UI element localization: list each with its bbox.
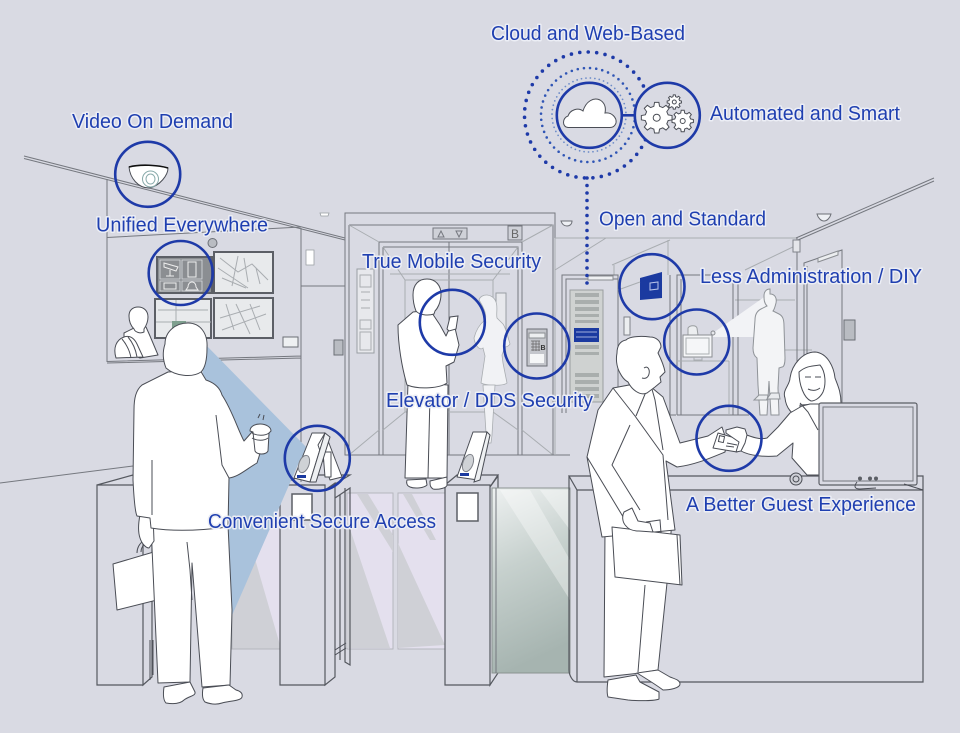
elevator: B	[511, 227, 519, 241]
turnstile reader centre	[294, 433, 342, 482]
hands exchanging guest card	[713, 427, 747, 452]
guest businessman	[587, 336, 727, 701]
back wall and server room	[555, 178, 934, 455]
intercom: B	[540, 345, 546, 352]
label: A Better Guest Experience: A Better Guest Experience	[686, 494, 916, 516]
intercom	[527, 329, 547, 366]
label: Elevator / DDS Security: Elevator / DDS Security	[386, 390, 593, 412]
turnstile reader right	[457, 432, 490, 482]
jacket	[133, 370, 262, 530]
highlight circles	[115, 83, 761, 491]
label: Unified Everywhere: Unified Everywhere	[96, 214, 268, 236]
icon: unified monitor panes	[160, 260, 202, 291]
icon: gears	[641, 95, 693, 133]
turnstile left	[97, 475, 153, 685]
coffee cup	[250, 414, 271, 454]
label: Video On Demand: Video On Demand	[72, 111, 233, 133]
head	[163, 323, 207, 375]
label: True Mobile Security: True Mobile Security	[362, 251, 541, 273]
reception monitor	[790, 403, 923, 490]
security monitor wall	[155, 238, 343, 355]
panel: glass gate panels	[232, 493, 445, 649]
label: Open and Standard: Open and Standard	[599, 208, 766, 230]
man with phone	[398, 279, 459, 489]
hand and legs	[151, 525, 232, 687]
icon: dome camera	[129, 165, 168, 188]
turnstile right	[445, 475, 498, 685]
left wall and ceiling	[0, 156, 345, 483]
masks behind cloud and gear circles	[557, 83, 700, 148]
woman in elevator	[474, 295, 510, 443]
dotted cloud rings and connector	[524, 52, 650, 288]
turnstile centre	[280, 475, 350, 685]
light beam to guard	[713, 295, 767, 337]
briefcase	[113, 538, 157, 610]
seated security operator	[115, 307, 158, 358]
reception desk	[569, 476, 923, 682]
icon: guard desk monitor	[676, 326, 729, 415]
receptionist	[741, 352, 841, 475]
guard standing in background	[753, 289, 785, 415]
icon: wall sign logo	[618, 272, 662, 300]
label: Less Administration / DIY: Less Administration / DIY	[700, 266, 922, 288]
elevator	[345, 213, 570, 455]
label: Convenient Secure Access: Convenient Secure Access	[208, 511, 436, 533]
man with coffee and briefcase	[113, 323, 271, 704]
label: Cloud and Web-Based: Cloud and Web-Based	[491, 23, 685, 45]
briefcase	[612, 520, 682, 585]
label: Automated and Smart: Automated and Smart	[710, 103, 900, 125]
glass barrier	[492, 488, 570, 673]
shoes	[163, 682, 195, 704]
icon: cloud	[564, 99, 616, 128]
blue camera view cone	[200, 342, 311, 620]
